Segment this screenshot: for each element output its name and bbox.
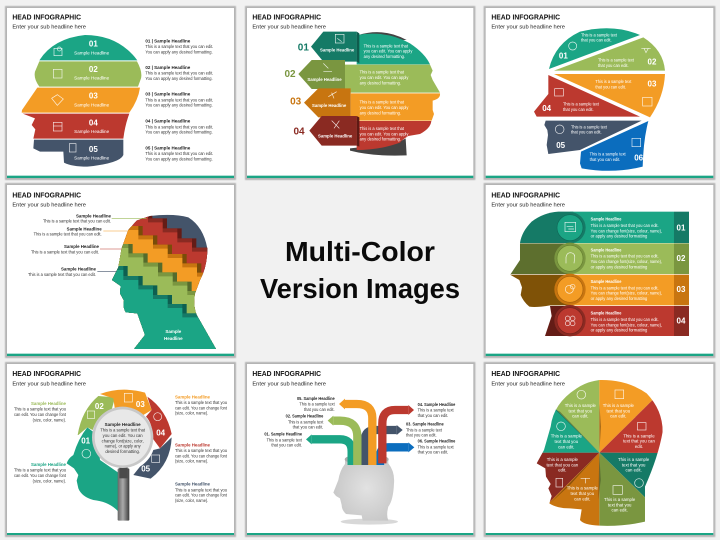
head band text: This is a sample text that	[360, 70, 405, 75]
head band text: This is a sample text that	[360, 100, 405, 105]
title: HEAD INFOGRAPHIC	[252, 369, 322, 378]
title: HEAD INFOGRAPHIC	[12, 369, 82, 378]
sector text: can edit.	[625, 468, 642, 473]
slice text: This is a sample text	[598, 58, 635, 63]
right text list: You can apply any desired formatting.	[145, 49, 213, 54]
sector text: This is a sample	[551, 434, 583, 439]
bar text	[591, 217, 662, 333]
left labels: that you can edit.	[271, 443, 302, 448]
sector text: edit.	[558, 468, 566, 473]
bar 03	[510, 275, 689, 307]
bar 01	[520, 212, 689, 243]
right text list: 05 | Sample Headline	[145, 145, 191, 150]
right text blocks: This is a sample text that you	[175, 448, 228, 453]
slice numbers: 06	[634, 153, 644, 162]
badge icons	[565, 222, 576, 326]
left text blocks: (size, color, name).	[33, 417, 66, 422]
slice 05	[544, 121, 642, 154]
sector text	[546, 403, 655, 513]
slice 04	[534, 75, 640, 117]
right text list: You can apply any desired formatting.	[145, 130, 213, 135]
right text blocks: can edit. You can change font	[175, 453, 228, 458]
right text blocks: can edit. You can change font	[175, 405, 228, 410]
head opening	[345, 454, 389, 465]
panel: head pie	[484, 360, 715, 540]
neck label	[164, 329, 183, 341]
bar text: Sample Headline	[591, 217, 622, 222]
head band orange	[351, 93, 440, 121]
left labels: Sample Headline	[76, 213, 112, 218]
bar text: or apply any desired formatting	[591, 234, 648, 239]
left text blocks: (size, color, name).	[33, 478, 66, 483]
subtitle: Enter your sub headline here	[491, 382, 565, 388]
band labels: 03	[89, 92, 98, 101]
sector text: This is a sample	[603, 403, 635, 408]
bar text: You can change font(size, colour, name),	[591, 259, 662, 264]
sector text: text that you can	[623, 439, 655, 444]
left labels: Sample Headline	[61, 266, 97, 271]
sector text: can edit.	[610, 414, 627, 419]
panel: arrows out of open head	[245, 362, 475, 537]
left labels: 05. Sample Headline	[297, 396, 335, 401]
right text list: 04 | Sample Headline	[145, 119, 191, 124]
slice text: that you can edit.	[598, 63, 629, 68]
sector text: text that you	[608, 502, 632, 507]
head band red	[357, 121, 431, 150]
bar text: This is a sample text that you can edit.	[591, 317, 659, 322]
left labels	[28, 213, 112, 277]
tab numbers: 02	[284, 69, 296, 80]
arrow segment 04	[146, 397, 172, 448]
left text blocks: This is a sample text that you	[14, 407, 67, 412]
right labels: This is a sample text	[406, 427, 443, 432]
right text list	[145, 38, 213, 161]
left labels: 01. Sample Headline	[264, 432, 303, 437]
segment icons	[82, 393, 162, 462]
sector text: This is a sample	[565, 403, 597, 408]
title: HEAD INFOGRAPHIC	[491, 369, 561, 378]
arrow segment 05	[133, 437, 172, 479]
tab labels: Sample Headline	[312, 103, 347, 108]
sector text: This is a sample	[604, 497, 636, 502]
slice text: This is a sample text	[581, 32, 618, 37]
sector text: can edit.	[572, 414, 589, 419]
right text blocks: This is a sample text that you	[175, 487, 228, 492]
band labels: 02	[89, 65, 98, 74]
sector text: can edit.	[611, 508, 628, 513]
slice text	[563, 32, 635, 162]
panel: head with arrow tabs	[245, 6, 475, 180]
slice text: that you can edit.	[571, 130, 602, 135]
left text blocks: can edit. You can change font	[14, 412, 67, 417]
right text blocks: can edit. You can change font	[175, 493, 228, 498]
segment numbers: 01	[81, 437, 91, 446]
bar text: This is a sample text that you can edit.	[591, 285, 659, 290]
left text blocks: Sample Headline	[31, 401, 67, 406]
arrow 03 navy	[365, 425, 403, 465]
left labels: 02. Sample Headline	[286, 414, 324, 419]
subtitle: Enter your sub headline here	[491, 203, 565, 209]
gray head	[333, 456, 394, 521]
right text blocks: Sample Headline	[175, 482, 211, 487]
lens text: change font(size, color,	[102, 438, 144, 443]
left labels: This is a sample text that you can edit.	[31, 249, 99, 254]
tab numbers: 01	[298, 42, 309, 53]
right text list: You can apply any desired formatting.	[145, 103, 213, 108]
heading: multi-color version images: Multi-Color	[285, 236, 435, 267]
subtitle: Enter your sub headline here	[252, 25, 326, 31]
sector text: text that you	[607, 408, 631, 413]
bar text: or apply any desired formatting	[591, 264, 648, 269]
slice numbers: 02	[648, 58, 657, 67]
head band green	[345, 65, 440, 93]
sector text: edit.	[635, 444, 643, 449]
lens text: This is a sample text that	[100, 428, 146, 433]
sector text: This is a sample	[623, 433, 655, 438]
heading: multi-color version images: Version Images	[260, 273, 460, 304]
sector text: can edit.	[574, 496, 591, 501]
slice numbers: 03	[648, 79, 657, 88]
circle badges	[554, 212, 586, 336]
stair head	[112, 214, 216, 349]
band 04	[23, 114, 129, 139]
title: HEAD INFOGRAPHIC	[252, 12, 322, 21]
subtitle: Enter your sub headline here	[252, 382, 326, 388]
head band text: you can edit. You can apply	[360, 131, 409, 136]
right text list: 03 | Sample Headline	[145, 92, 191, 97]
title: HEAD INFOGRAPHIC	[12, 190, 82, 199]
left labels: that you can edit.	[293, 425, 323, 430]
slice text: This is a sample text	[595, 79, 632, 84]
right text list: This is a sample text that you can edit.	[145, 71, 213, 76]
right text list: This is a sample text that you can edit.	[145, 44, 213, 49]
left labels: This is a sample text	[267, 437, 303, 442]
panel: silhouette with bars	[484, 183, 715, 358]
head segment 01	[67, 427, 119, 513]
tab numbers: 04	[293, 127, 305, 138]
lens text: Sample Headline	[105, 422, 141, 427]
numbers: 01	[677, 223, 686, 232]
sector text: This is a sample	[567, 486, 599, 491]
neck label: Headline	[164, 336, 183, 341]
slice 02	[554, 37, 665, 71]
right text list: 02 | Sample Headline	[145, 65, 191, 70]
right text list: This is a sample text that you can edit.	[145, 97, 213, 102]
neck label: Sample	[165, 329, 182, 334]
arrow tab 04 body	[309, 116, 357, 146]
lens text	[100, 422, 146, 454]
left labels: Sample Headline	[64, 244, 100, 249]
left labels: Sample Headline	[67, 226, 102, 231]
arrow 05 orange	[339, 399, 372, 465]
panel: staircase head	[5, 183, 236, 358]
left labels: This is a sample text	[288, 419, 324, 424]
head band teal	[357, 34, 430, 64]
slice icons	[555, 42, 652, 147]
slice 03	[554, 74, 665, 117]
band labels: Sample Headline	[74, 50, 110, 55]
arrow tab 02	[298, 60, 345, 89]
sector text: text that you can	[546, 462, 579, 467]
segment numbers: 03	[136, 400, 145, 409]
pie dividing creases	[550, 403, 601, 503]
slice 06	[580, 121, 648, 171]
sector text: This is a sample	[618, 457, 650, 462]
tab labels	[307, 47, 355, 138]
left labels: This is a sample text that you can edit.	[43, 219, 111, 224]
right labels	[406, 402, 456, 455]
panel: magnifier head cycle	[5, 362, 236, 537]
bar text: Sample Headline	[591, 247, 622, 252]
sector text: This is a sample	[547, 457, 579, 462]
right labels: that you can edit.	[418, 450, 448, 455]
sector text: can edit.	[558, 444, 575, 449]
right labels: This is a sample text	[418, 408, 454, 413]
head band text: any desired formatting.	[360, 110, 401, 115]
sector text: text that you	[622, 462, 646, 467]
right labels: that you can edit.	[406, 433, 437, 438]
band labels: 01	[89, 40, 98, 49]
right text list: This is a sample text that you can edit.	[145, 124, 213, 129]
pie sectors	[536, 380, 663, 526]
head band text: any desired formatting.	[364, 54, 405, 59]
tab labels: Sample Headline	[307, 77, 342, 82]
head band text: any desired formatting.	[360, 80, 401, 85]
bar text: This is a sample text that you can edit.	[591, 223, 659, 228]
arrow 06 blue	[380, 442, 414, 465]
tab numbers: 03	[290, 97, 302, 108]
bar text: You can change font(size, colour, name),	[591, 322, 662, 327]
right text blocks: (size, color, name).	[175, 459, 208, 464]
arrow tab 01	[357, 32, 359, 63]
left labels: This is a sample text that you can edit.	[28, 272, 96, 277]
slice text: that you can edit.	[581, 38, 612, 43]
slice text: This is a sample text	[590, 152, 626, 157]
slice text: that you can edit.	[590, 157, 620, 162]
left text blocks: This is a sample text that you	[14, 468, 67, 473]
left text blocks: can edit. You can change font	[14, 473, 67, 478]
arrow tab 03	[304, 88, 351, 117]
slice text: that you can edit.	[595, 84, 626, 89]
dark crown and neck edges	[350, 32, 407, 156]
head band text: any desired formatting.	[360, 137, 401, 142]
arrow 01 teal	[306, 434, 352, 465]
right text list: 01 | Sample Headline	[145, 38, 191, 43]
head band text	[360, 43, 413, 142]
arrow tab 04	[357, 116, 359, 147]
segment numbers: 05	[141, 464, 151, 473]
heading: multi-color version images	[260, 236, 460, 304]
bar text: Sample Headline	[591, 279, 622, 284]
right labels: that you can edit.	[418, 413, 448, 418]
slice 01	[549, 28, 640, 69]
subtitle: Enter your sub headline here	[12, 382, 86, 388]
band labels	[74, 40, 110, 160]
bar text: You can change font(size, colour, name),	[591, 228, 662, 233]
leader lines	[97, 218, 147, 272]
arrow 04 red	[382, 405, 414, 463]
title: HEAD INFOGRAPHIC	[12, 12, 82, 21]
band icons	[52, 47, 76, 152]
band labels: Sample Headline	[74, 129, 110, 134]
head band text: you can edit. You can apply	[360, 75, 409, 80]
sector icons	[556, 390, 646, 494]
band 03	[22, 88, 140, 113]
sector text: text that you	[569, 408, 593, 413]
left labels	[264, 396, 335, 448]
bar text: This is a sample text that you can edit.	[591, 254, 659, 259]
right labels: 06. Sample Headline	[418, 439, 456, 444]
tab labels: Sample Headline	[318, 133, 353, 138]
panel: head bands with five numbered layers	[5, 6, 236, 180]
right text blocks	[175, 394, 228, 503]
title: HEAD INFOGRAPHIC	[491, 12, 561, 21]
slice text: that you can edit.	[563, 107, 594, 112]
magnifier lens	[92, 407, 153, 468]
right text blocks: This is a sample text that you	[175, 400, 228, 405]
subtitle: Enter your sub headline here	[12, 203, 86, 209]
bar text: You can change font(size, colour, name),	[591, 291, 662, 296]
segment numbers: 04	[156, 429, 166, 438]
slice numbers: 04	[542, 104, 552, 113]
arrow 02 green	[328, 416, 357, 465]
left labels: This is a sample text that you can edit.	[34, 232, 102, 237]
lens text: desired formatting.	[105, 449, 140, 454]
lens text: you can edit. You can	[103, 433, 143, 438]
band 05	[33, 140, 123, 167]
right text list: You can apply any desired formatting.	[145, 156, 213, 161]
numbers: 04	[677, 317, 686, 326]
head band text: you can edit. You can apply	[364, 49, 413, 54]
bar 02	[511, 243, 689, 274]
segment numbers: 02	[95, 402, 104, 411]
head band text: you can edit. You can apply	[360, 105, 409, 110]
slice numbers: 01	[559, 51, 568, 60]
bar 04	[545, 306, 689, 336]
tab icons	[323, 34, 344, 128]
head band text: This is a sample text that	[364, 43, 409, 48]
tab labels: Sample Headline	[320, 47, 355, 52]
magnifier handle	[118, 467, 129, 521]
bar text: or apply any desired formatting	[591, 296, 648, 301]
head band text: This is a sample text that	[360, 126, 405, 131]
lens text: name), or apply any	[105, 444, 141, 449]
numbers: 02	[677, 254, 686, 263]
arrow segment 03	[100, 390, 152, 415]
subtitle: Enter your sub headline here	[491, 25, 565, 31]
segment numbers	[81, 400, 166, 473]
right text list: You can apply any desired formatting.	[145, 76, 213, 81]
slice numbers: 05	[556, 141, 566, 150]
arrow tab 01 body	[311, 32, 357, 62]
left labels: This is a sample text	[299, 402, 335, 407]
bar text: Sample Headline	[591, 311, 622, 316]
right text blocks: Sample Headline	[175, 394, 211, 399]
right text blocks: Sample Headline	[175, 442, 211, 447]
head base	[341, 519, 398, 525]
band 01	[39, 35, 137, 60]
band labels: Sample Headline	[74, 76, 110, 81]
arrow segment 02	[78, 396, 115, 435]
tab numbers	[284, 42, 309, 138]
numbers: 03	[677, 285, 686, 294]
slice numbers	[542, 51, 657, 162]
right labels: 03. Sample Headline	[406, 422, 444, 427]
band labels: Sample Headline	[74, 102, 110, 107]
left labels: that you can edit.	[304, 407, 335, 412]
band labels: Sample Headline	[74, 155, 110, 160]
subtitle: Enter your sub headline here	[12, 25, 86, 31]
left text blocks: Sample Headline	[31, 462, 67, 467]
sector text: text that you	[555, 439, 579, 444]
band labels: 05	[89, 145, 98, 154]
slice text: This is a sample text	[563, 102, 600, 107]
right text blocks: (size, color, name).	[175, 411, 208, 416]
slice text: This is a sample text	[571, 124, 608, 129]
band 02	[35, 61, 141, 87]
title: HEAD INFOGRAPHIC	[491, 190, 561, 199]
right text blocks: (size, color, name).	[175, 498, 208, 503]
sector text: text that you	[571, 491, 595, 496]
right text list: This is a sample text that you can edit.	[145, 151, 213, 156]
numbers	[677, 223, 686, 326]
left text blocks	[14, 401, 67, 483]
band labels: 04	[89, 118, 98, 127]
bar text: or apply any desired formatting	[591, 328, 648, 333]
right labels: This is a sample text	[418, 444, 454, 449]
right labels: 04. Sample Headline	[418, 402, 456, 407]
panel: head split into six slices	[484, 6, 715, 180]
